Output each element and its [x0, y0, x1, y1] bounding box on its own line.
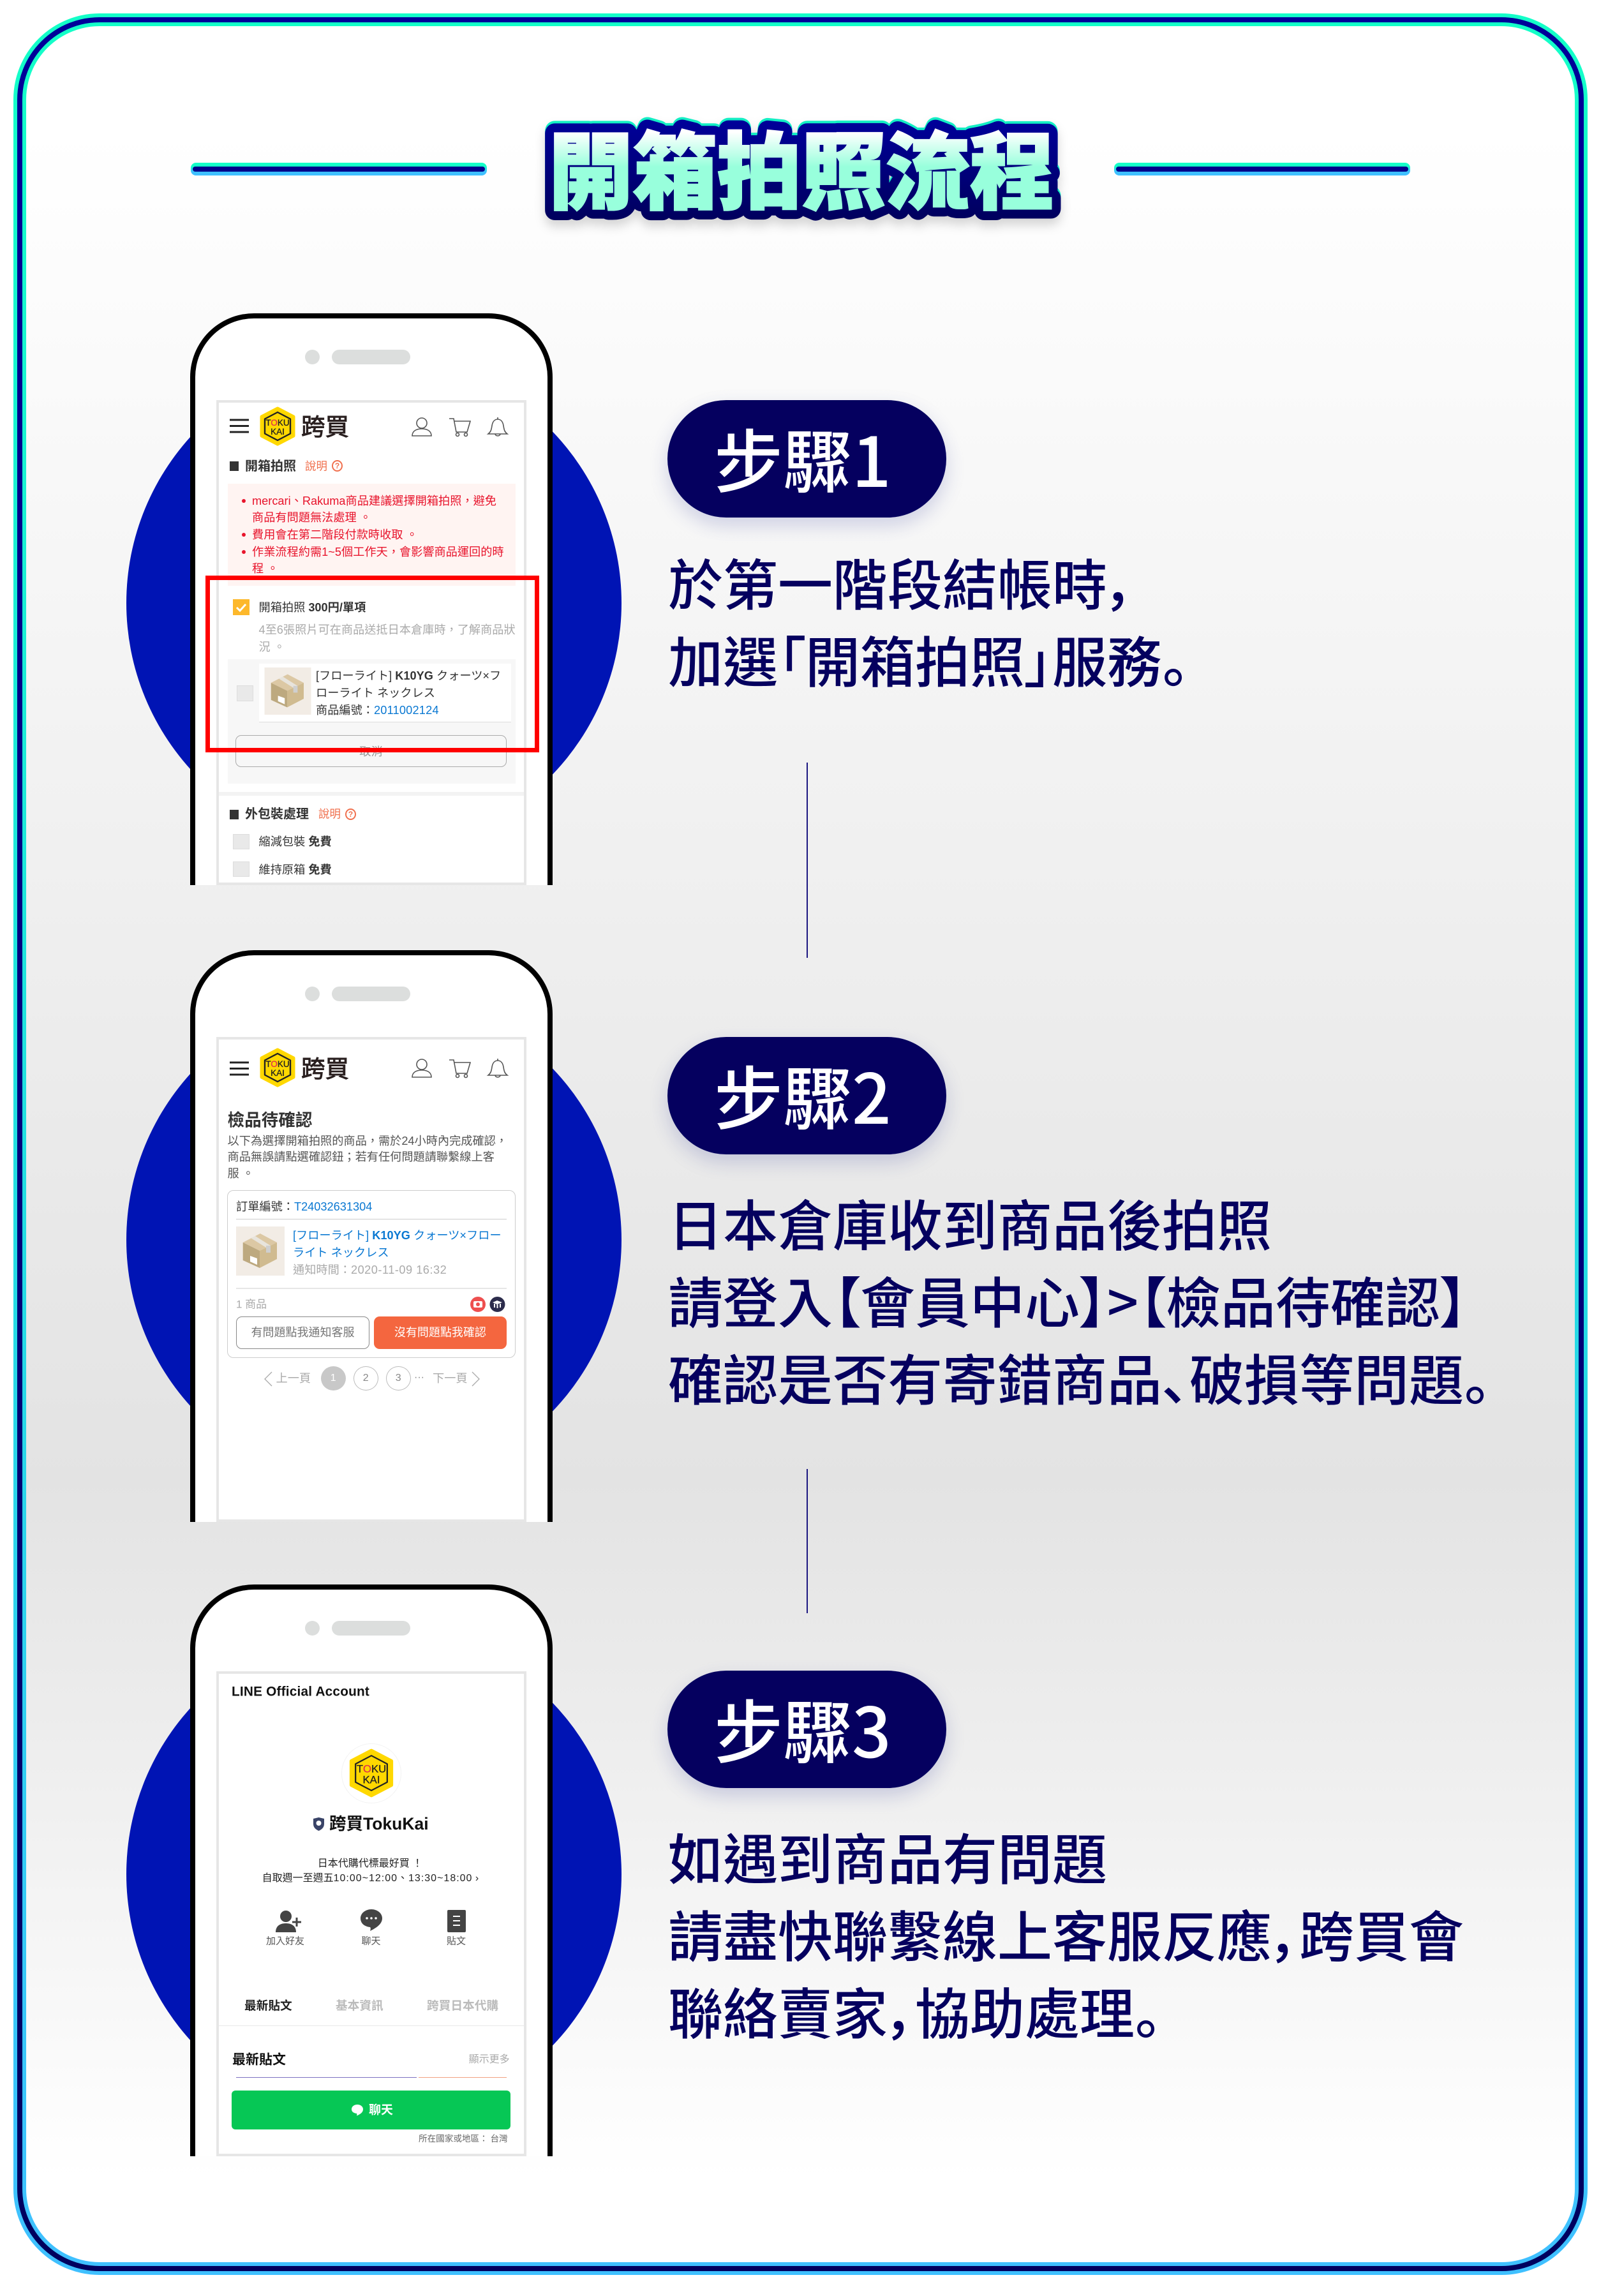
product card [259, 664, 511, 722]
icon: posts [447, 1910, 466, 1932]
circle backdrop: step 1 [126, 355, 622, 851]
circle backdrop: step 3 [126, 1627, 622, 2122]
product checkbox [237, 685, 253, 701]
option label: 開箱拍照 300円/單項 [259, 601, 366, 614]
screen: LINE profile [216, 1671, 526, 2156]
option description line 2: 況 。 [259, 640, 285, 653]
product name line 2: ローライト ネックレス [316, 687, 435, 699]
product name: [フローライト] K10YG クォーツ×フ [316, 669, 501, 682]
post card top edge: orange [419, 2077, 507, 2078]
step description: 如遇到商品有問題 [668, 1815, 1107, 1895]
step badge: 步驟2 [714, 1045, 891, 1144]
help link: 說明 [318, 807, 341, 820]
page 1 [321, 1366, 346, 1390]
speaker [332, 987, 410, 1001]
cancel label: 取消 [359, 745, 383, 758]
notice line: 程 。 [252, 562, 278, 575]
next arrow [472, 1371, 480, 1387]
phone mockup: step 3 LINE support account [190, 1584, 553, 2156]
label: chat: 聊天 [361, 1936, 381, 1946]
phone mockup: step 2 inspection confirmation [190, 950, 553, 1522]
phone shell [190, 313, 553, 885]
step badge [667, 400, 946, 518]
step description: 加選「開箱拍照」服務。 [668, 618, 1189, 698]
step badge [667, 1037, 946, 1154]
option label: 維持原箱 免費 [259, 863, 332, 876]
notice line: mercari、Rakuma商品建議選擇開箱拍照，避免 [252, 494, 496, 507]
product name: [フローライト] K10YG クォーツ×フロー [293, 1228, 502, 1241]
help icon [332, 460, 343, 472]
step badge [667, 1671, 946, 1788]
account label: LINE Official Account [232, 1685, 369, 1699]
option description: 4至6張照片可在商品送抵日本倉庫時，了解商品狀 [259, 623, 516, 636]
opening hours: 自取週一至週五10:00~12:00、13:30~18:00 › [262, 1873, 479, 1884]
logo ring [341, 1743, 401, 1803]
icon: camera [470, 1297, 486, 1312]
page 2: 2 [363, 1373, 369, 1383]
button: confirm: 沒有問題點我確認 [394, 1326, 486, 1339]
logo [348, 1748, 394, 1798]
section title: 開箱拍照 [245, 459, 296, 473]
help link: 說明 [305, 459, 327, 472]
app header [230, 1048, 509, 1087]
section marker [230, 461, 239, 471]
speaker [332, 1621, 410, 1636]
intro line: 服 。 [227, 1167, 254, 1179]
notification time: 通知時間：2020-11-09 16:32 [293, 1263, 447, 1276]
app header: 跨買 [301, 1055, 349, 1082]
connector line 1 [807, 763, 808, 958]
notice box [228, 484, 516, 586]
step 1 [667, 400, 1497, 706]
heading rule: left [191, 163, 487, 175]
camera dot [305, 987, 320, 1001]
screen: checkout options [216, 400, 526, 885]
app header [230, 407, 509, 445]
tab: agency: 跨買日本代購 [427, 1999, 498, 2012]
step description [668, 1817, 1464, 2048]
icon: verified shield [313, 1817, 325, 1831]
logo: TOKU [357, 1763, 386, 1775]
connector line 2 [807, 1469, 808, 1613]
notice bullet [242, 533, 246, 537]
circle backdrop: step 2 [126, 992, 622, 1487]
step description: 確認是否有寄錯商品、破損等問題。 [668, 1336, 1491, 1415]
help icon: ? [348, 810, 353, 819]
cancel button [235, 735, 507, 767]
step description: 日本倉庫收到商品後拍照 [668, 1182, 1272, 1261]
app header: 跨買 [301, 414, 349, 440]
camera dot [305, 1621, 320, 1636]
step description [668, 1183, 1491, 1414]
post card top edge: purple [236, 2077, 417, 2078]
camera dot [305, 350, 320, 364]
product number: 商品編號：2011002124 [316, 704, 439, 717]
product name line 2: ライト ネックレス [293, 1246, 389, 1258]
page 3 [386, 1366, 411, 1390]
card rule [236, 1288, 507, 1289]
step badge: 步驟3 [714, 1678, 891, 1778]
region note: 所在國家或地區： 台灣 [419, 2134, 508, 2143]
icon: open box [489, 1297, 505, 1312]
speaker [332, 350, 410, 364]
more link: 顯示更多 [469, 2054, 510, 2065]
label: add friend: 加入好友 [266, 1936, 304, 1946]
step 2 [667, 1037, 1497, 1420]
checked checkbox [233, 599, 249, 615]
next label: 下一頁 [433, 1372, 468, 1385]
help icon [345, 809, 356, 820]
notice bullet [242, 550, 246, 554]
tab: basic info: 基本資訊 [336, 1999, 383, 2012]
notice bullet [242, 499, 246, 503]
section title: 外包裝處理 [245, 807, 309, 821]
phone shell [190, 1584, 553, 2156]
title: 開箱拍照流程 [549, 105, 1054, 227]
phone shell [190, 950, 553, 1522]
step description: 請盡快聯繫線上客服反應，跨買會 [668, 1893, 1464, 1972]
title: 開箱拍照流程 [549, 105, 1054, 227]
list heading: 最新貼文 [232, 2052, 286, 2068]
account name: 跨買TokuKai [329, 1814, 429, 1833]
step description [668, 542, 1189, 697]
section divider [219, 792, 524, 796]
notice line: 作業流程約需1~5個工作天，會影響商品運回的時 [252, 546, 504, 558]
step description: 請登入【會員中心】>【檢品待確認】 [668, 1258, 1468, 1339]
app header: TOKU [265, 418, 290, 428]
button label: 聊天 [369, 2103, 393, 2117]
button: notify support: 有問題點我通知客服 [251, 1326, 355, 1339]
help icon: ? [335, 461, 339, 470]
tab rule [219, 2025, 524, 2026]
pagination [261, 1362, 478, 1394]
product thumbnail: cardboard box [236, 1226, 285, 1276]
ellipsis: ··· [414, 1372, 424, 1383]
app header: TOKU [265, 1059, 290, 1069]
previous label: 上一頁 [276, 1372, 311, 1385]
green chat button [232, 2091, 510, 2129]
icon: add friend [276, 1910, 301, 1932]
previous arrow [264, 1371, 272, 1387]
logo: KAI [362, 1774, 380, 1786]
order number: 訂單編號：T24032631304 [236, 1200, 372, 1213]
screen: items awaiting confirmation [216, 1037, 526, 1522]
tab: latest posts: 最新貼文 [244, 1999, 292, 2012]
icon: chat [361, 1909, 382, 1932]
page 3: 3 [396, 1373, 401, 1383]
checkbox [233, 861, 249, 877]
page heading: 檢品待確認 [227, 1111, 312, 1130]
intro line: 以下為選擇開箱拍照的商品，需於24小時內完成確認， [227, 1134, 507, 1147]
product thumbnail: cardboard box [264, 667, 311, 715]
app header: KAI [271, 1068, 285, 1078]
label: posts: 貼文 [447, 1936, 466, 1946]
product area [228, 659, 516, 784]
checkbox [233, 834, 249, 849]
notice line: 費用會在第二階段付款時收取 。 [252, 528, 418, 541]
icon: chat bubble [352, 2104, 363, 2116]
red highlight box [205, 576, 539, 752]
heading rule: right [1114, 163, 1410, 175]
page 2 [354, 1366, 378, 1390]
page 1: 1 [331, 1373, 336, 1383]
app header: KAI [271, 427, 285, 436]
item count: 1 商品 [236, 1298, 267, 1311]
order card [227, 1190, 516, 1358]
step description: 於第一階段結帳時， [668, 541, 1135, 620]
step description: 聯絡賣家，協助處理。 [668, 1970, 1162, 2050]
intro line: 商品無誤請點選確認鈕；若有任何問題請聯繫線上客 [227, 1151, 495, 1163]
button: notify support [236, 1316, 369, 1349]
option label: 縮減包裝 免費 [259, 835, 332, 848]
notice line: 商品有問題無法處理 。 [252, 511, 371, 524]
section marker [230, 810, 239, 819]
step badge: 步驟1 [714, 408, 891, 507]
tagline: 日本代購代標最好買 ！ [318, 1858, 422, 1869]
button: confirm [374, 1316, 507, 1349]
step 3 [667, 1671, 1497, 2054]
phone mockup: step 1 checkout [190, 313, 553, 885]
